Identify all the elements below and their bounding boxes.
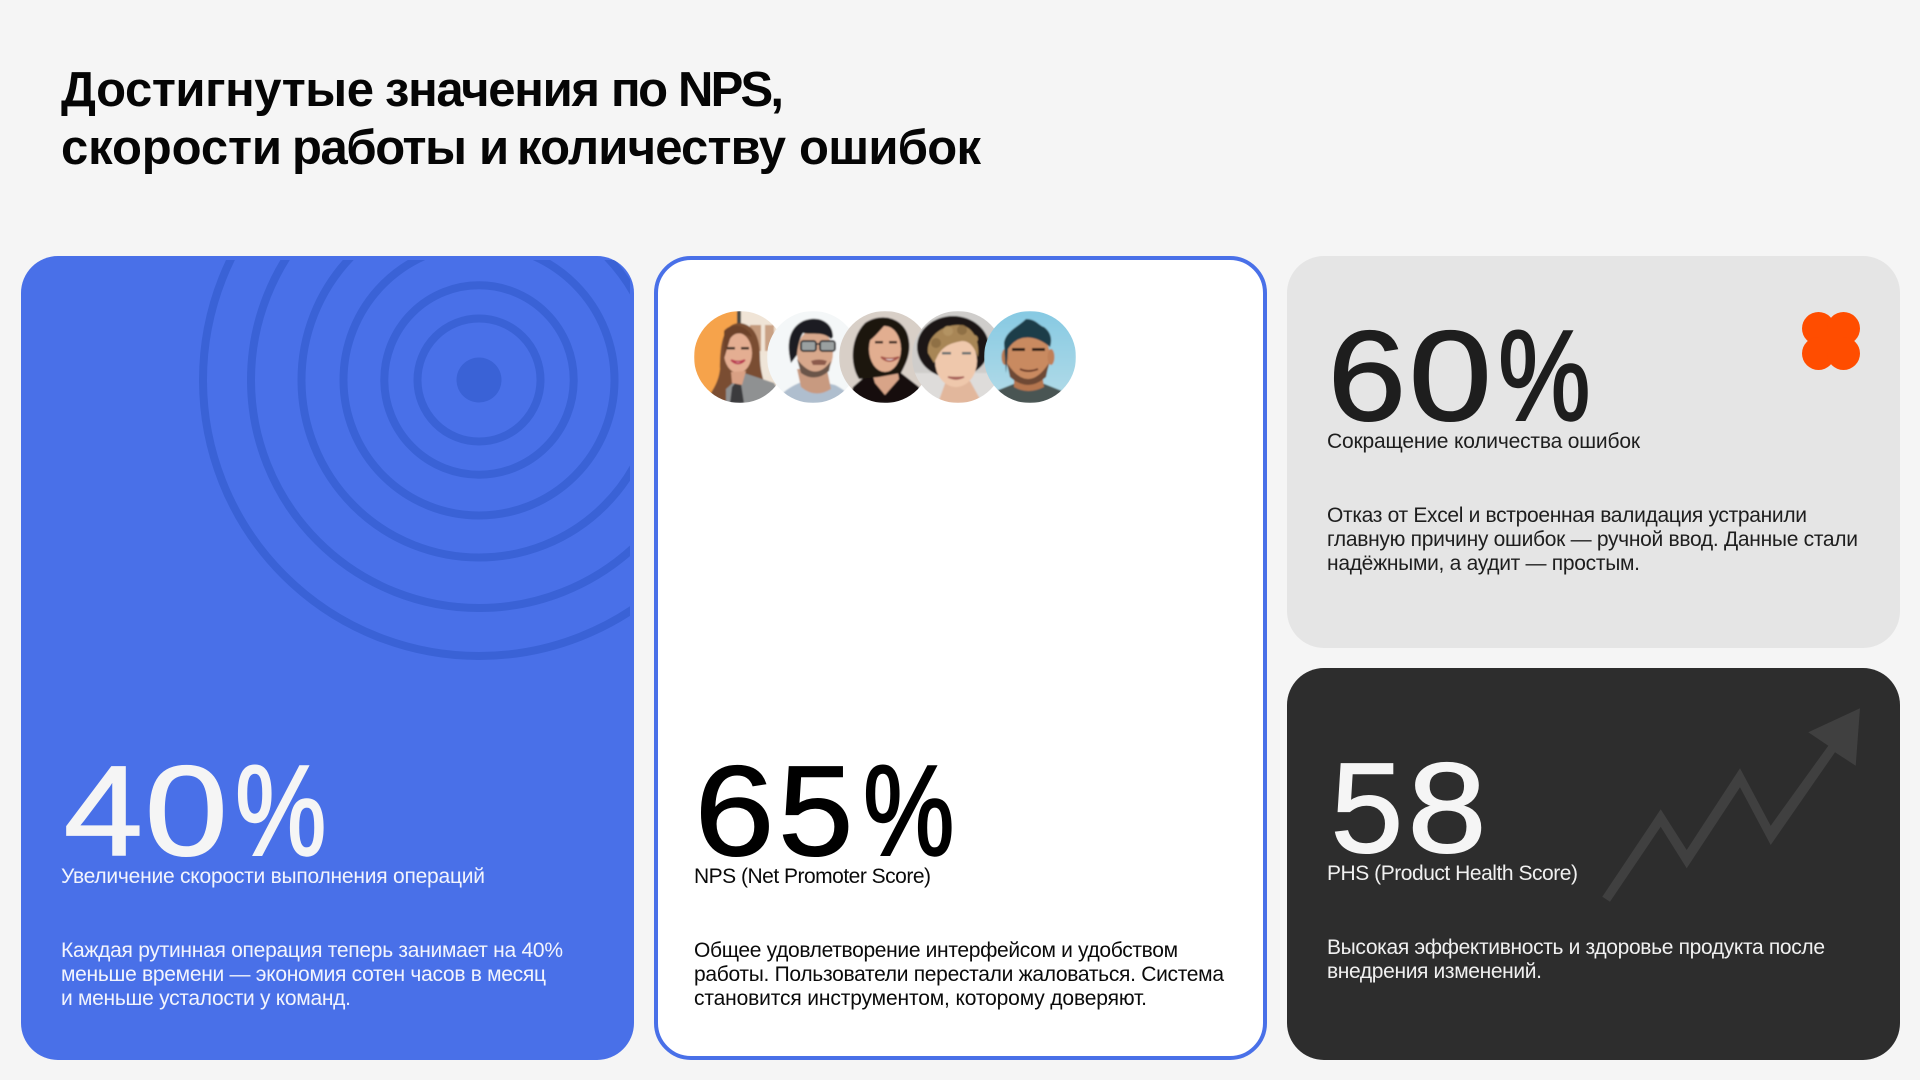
body text: Отказ от Excel и встроенная валидация устранили bbox=[1327, 504, 1807, 527]
number 58: 8 bbox=[1408, 737, 1487, 879]
title: скорости bbox=[61, 121, 282, 175]
avatars row bbox=[694, 311, 1076, 403]
title: по bbox=[611, 63, 668, 117]
panel: PHS 58 bbox=[1287, 668, 1900, 1060]
body text bbox=[1327, 504, 1858, 575]
number 58 bbox=[1331, 737, 1487, 880]
number 40%: 0 bbox=[145, 740, 228, 883]
body text: надёжными, а аудит — простым. bbox=[1327, 552, 1640, 575]
number 60% bbox=[1328, 304, 1590, 448]
number 65%: 5 bbox=[778, 739, 853, 882]
title: NPS, bbox=[678, 63, 784, 117]
avatar 3 bbox=[839, 311, 922, 403]
avatar 5 bbox=[984, 311, 1076, 403]
title: Достигнутые bbox=[61, 63, 374, 117]
avatar 4 bbox=[913, 311, 994, 403]
subtitle: Сокращение количества ошибок bbox=[1327, 430, 1641, 453]
subtitle: NPS (Net Promoter Score) bbox=[694, 865, 931, 888]
number 60%: 6 bbox=[1328, 304, 1406, 448]
avatar 2 bbox=[767, 312, 848, 403]
panel: errors 60% bbox=[1287, 256, 1900, 648]
body text: меньше времени — экономия сотен часов в месяц bbox=[61, 963, 546, 986]
subtitle: PHS (Product Health Score) bbox=[1327, 862, 1578, 885]
title: работы bbox=[292, 121, 467, 175]
panel: speed 40% bbox=[21, 256, 634, 1060]
panel: NPS 65% bbox=[656, 258, 1265, 1058]
number 40%: % bbox=[235, 739, 326, 883]
subtitle: Увеличение скорости выполнения операций bbox=[61, 865, 485, 888]
body text: становится инструментом, которому доверяют. bbox=[694, 987, 1147, 1010]
body text bbox=[1327, 936, 1825, 983]
number 40%: 4 bbox=[64, 740, 143, 882]
title bbox=[61, 63, 981, 175]
body text: Общее удовлетворение интерфейсом и удобством bbox=[694, 939, 1178, 962]
number 60%: % bbox=[1498, 305, 1590, 447]
avatar 1 bbox=[694, 311, 776, 403]
number 58: 5 bbox=[1331, 737, 1403, 880]
body text: внедрения изменений. bbox=[1327, 960, 1542, 983]
title: и bbox=[479, 121, 509, 175]
icon: rising arrow bbox=[1602, 708, 1860, 902]
concentric rings decoration bbox=[199, 260, 630, 660]
number 40% bbox=[64, 739, 326, 883]
number 65% bbox=[695, 739, 954, 883]
number 65%: 6 bbox=[695, 739, 774, 882]
body text: Каждая рутинная операция теперь занимает на 40% bbox=[61, 939, 563, 962]
body text: главную причину ошибок — ручной ввод. Данные стали bbox=[1327, 528, 1858, 551]
number 60%: 0 bbox=[1409, 305, 1492, 448]
icon: orange clover bbox=[1802, 312, 1860, 370]
title: количеству bbox=[517, 121, 786, 175]
title: значения bbox=[385, 63, 600, 117]
body text: работы. Пользователи перестали жаловаться. Система bbox=[694, 963, 1224, 986]
body text: Высокая эффективность и здоровье продукта после bbox=[1327, 936, 1825, 959]
body text: и меньше усталости у команд. bbox=[61, 987, 351, 1010]
title: ошибок bbox=[799, 121, 981, 175]
body text bbox=[694, 939, 1224, 1010]
number 65%: % bbox=[863, 739, 954, 883]
body text bbox=[61, 939, 563, 1010]
